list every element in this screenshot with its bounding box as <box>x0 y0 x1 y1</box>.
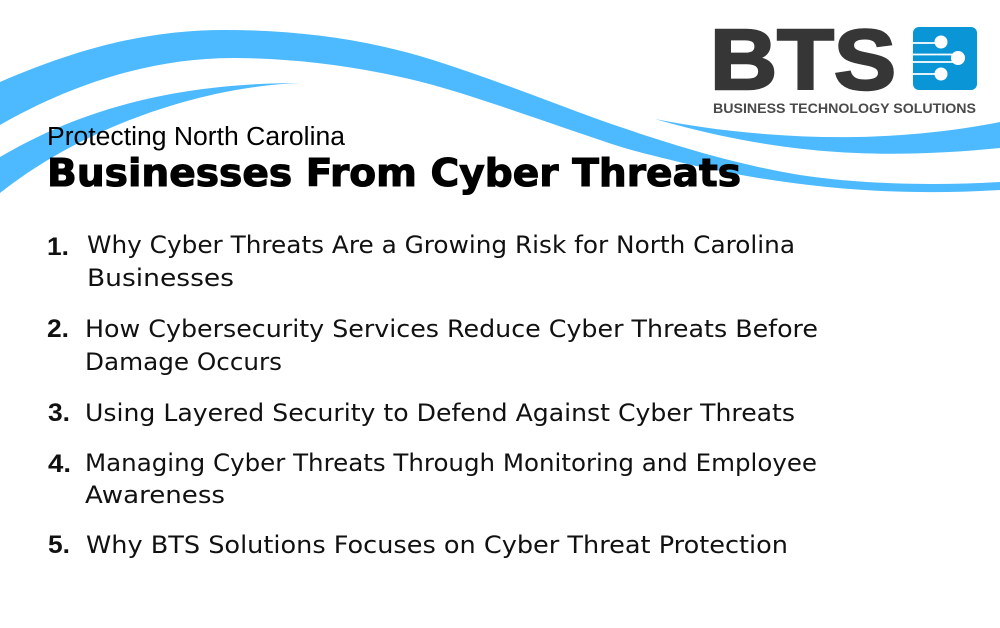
title line 2: Businesses From Cyber Threats <box>47 151 741 196</box>
numbered list <box>47 231 818 559</box>
list item 2: 2. <box>47 315 69 343</box>
logo icon: circuit square <box>913 27 977 90</box>
list item 1: Businesses <box>87 264 234 292</box>
logo: BTS <box>710 13 977 116</box>
list item 5: 5. <box>48 531 70 559</box>
list item 1 <box>47 231 795 292</box>
list item 4: Awareness <box>85 481 225 509</box>
list item 1: 1. <box>47 233 69 261</box>
list item 2: How Cybersecurity Services Reduce Cyber Threats Before <box>85 315 818 343</box>
list item 4: Managing Cyber Threats Through Monitoring and Employee <box>85 449 817 477</box>
list item 4: 4. <box>48 450 71 478</box>
title block <box>47 123 741 196</box>
list item 5: Why BTS Solutions Focuses on Cyber Threat Protection <box>86 531 788 559</box>
logo wordmark: BTS <box>710 13 896 108</box>
list item 3: 3. <box>48 399 70 427</box>
title line 1: Protecting North Carolina <box>47 123 346 151</box>
list item 3: Using Layered Security to Defend Against Cyber Threats <box>85 399 795 427</box>
logo tagline: BUSINESS TECHNOLOGY SOLUTIONS <box>713 101 976 116</box>
wave: lower left blue swoosh <box>0 83 300 193</box>
list item 2: Damage Occurs <box>85 348 282 376</box>
wave: main blue band <box>0 30 1000 192</box>
list item 4 <box>48 449 817 509</box>
list item 2 <box>47 315 818 376</box>
wave: upper right blue swoosh <box>655 119 1000 154</box>
list item 1: Why Cyber Threats Are a Growing Risk for North Carolina <box>87 231 795 259</box>
